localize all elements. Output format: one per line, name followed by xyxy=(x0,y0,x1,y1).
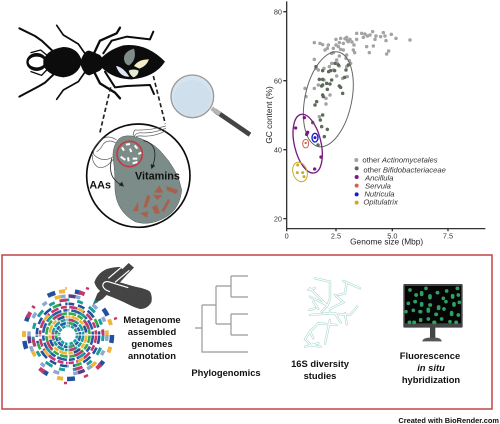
label: 16S diversity studies xyxy=(291,358,350,381)
x axis tick labels: 2.5 xyxy=(331,231,341,240)
Servula ellipse xyxy=(303,139,309,148)
icon: 16S rRNA structure xyxy=(305,278,360,347)
legend: other Actinomycetales xyxy=(362,156,438,165)
food particles xyxy=(133,185,178,218)
icon: hand holding pen xyxy=(93,263,152,309)
Opitulatrix ellipse xyxy=(290,160,310,184)
organs in abdomen xyxy=(116,49,149,77)
purple ellipse: Ancillula xyxy=(288,111,327,176)
icon: ant silhouette xyxy=(19,25,165,99)
arrows xyxy=(111,141,155,185)
gut body xyxy=(113,136,182,223)
label: 16S diversity studies: 16S diversity xyxy=(291,358,350,369)
y axis tick labels xyxy=(274,7,282,223)
label: Metagenome assembled genomes annotation xyxy=(123,314,181,361)
panel: ant illustration xyxy=(19,25,250,227)
Nutricula ellipse xyxy=(312,133,318,142)
outer grey ellipse xyxy=(295,47,361,151)
label: Metagenome assembled genomes annotation: assembled xyxy=(128,326,177,337)
y axis tick labels: 60 xyxy=(274,76,282,85)
y axis tick labels: 40 xyxy=(274,145,282,154)
label: Metagenome assembled genomes annotation: Metagenome xyxy=(123,314,181,325)
tracheal tubes xyxy=(93,126,166,168)
thorax xyxy=(80,51,107,75)
axes xyxy=(283,1,485,231)
x axis tick labels xyxy=(285,231,453,240)
label: Fluorescence in situ hybridization xyxy=(400,350,460,385)
label: Fluorescence in situ hybridization: Fluorescence xyxy=(400,350,460,361)
label: Metagenome assembled genomes annotation: annotation xyxy=(128,350,176,361)
label: Metagenome assembled genomes annotation: genomes xyxy=(131,338,173,349)
purple points xyxy=(296,118,321,169)
legend: Servula xyxy=(365,181,391,190)
label: Vitamins: Vitamins xyxy=(135,171,180,183)
head xyxy=(43,47,82,77)
scatter plot xyxy=(264,1,485,247)
y axis tick labels: 20 xyxy=(274,214,282,223)
y axis title: GC content (%) xyxy=(264,86,274,144)
legend: Opitulatrix xyxy=(363,198,399,207)
gut circle inset xyxy=(87,124,190,227)
x axis title: Genome size (Mbp) xyxy=(350,237,423,247)
x axis tick labels: 5.0 xyxy=(387,231,397,240)
dashed zoom lines xyxy=(99,76,165,135)
legend: Ancillula xyxy=(364,173,394,182)
icon: monitor with FISH image xyxy=(403,284,463,341)
x axis tick labels: 7.5 xyxy=(443,231,453,240)
panel: methods box xyxy=(2,255,492,409)
legend xyxy=(354,156,446,207)
mandibles xyxy=(26,53,47,71)
red crypt with bacteria xyxy=(117,141,142,167)
gray points: other Actinomycetales xyxy=(305,32,410,117)
x axis tick labels: 0 xyxy=(285,231,289,240)
label: AAs: AAs xyxy=(89,180,111,192)
label: Fluorescence in situ hybridization: hybridization xyxy=(402,374,460,385)
label: 16S diversity studies: studies xyxy=(304,370,336,381)
legend: Nutricula xyxy=(364,190,395,199)
label: Phylogenomics: Phylogenomics xyxy=(191,367,261,378)
abdomen xyxy=(97,45,165,79)
y axis tick labels: 80 xyxy=(274,7,282,16)
dark green points: other Bifidobacteriaceae xyxy=(313,63,348,145)
legend: other Bifidobacteriaceae xyxy=(363,165,446,174)
icon: circular genome plot xyxy=(24,287,117,383)
label: Fluorescence in situ hybridization: in situ xyxy=(417,362,445,373)
icon: phylogenetic tree xyxy=(195,276,248,352)
icon: magnifying glass xyxy=(171,75,250,135)
